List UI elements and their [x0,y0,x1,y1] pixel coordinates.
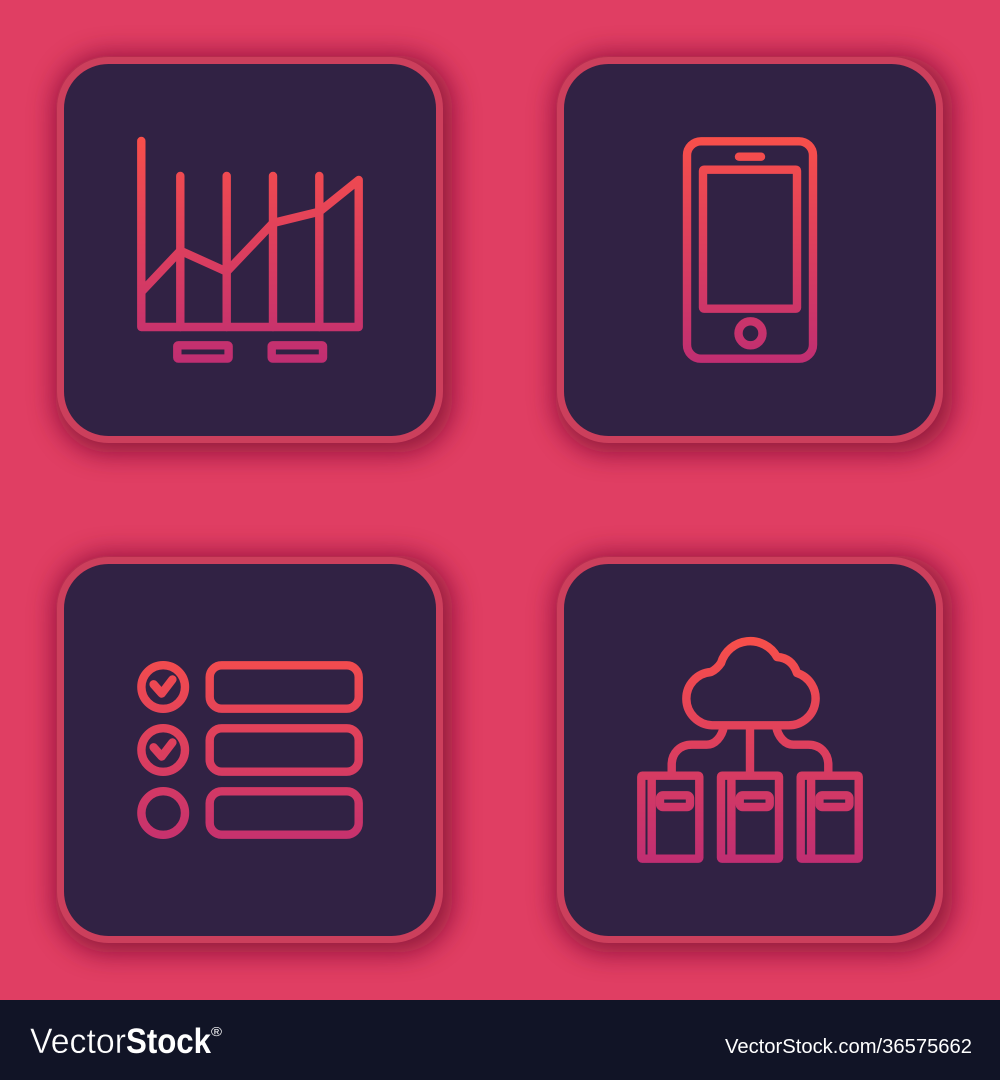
icon: cloud network [641,641,859,859]
icon: smartphone [687,141,813,359]
logo: VectorStock: Vector [30,1022,126,1061]
panel: checklist icon [56,556,452,952]
footer url: VectorStock.com/36575662 [725,1035,972,1058]
logo: VectorStock: ® [211,1024,222,1039]
panel: line chart icon [56,56,452,452]
panel: cloud servers icon [556,556,952,952]
logo: VectorStock: Stock [126,1022,211,1061]
footer bar [0,1000,1000,1080]
panel: smartphone icon [556,56,952,452]
icon: line chart [141,141,359,359]
icon: checklist [141,665,359,835]
logo: VectorStock [30,1022,222,1061]
